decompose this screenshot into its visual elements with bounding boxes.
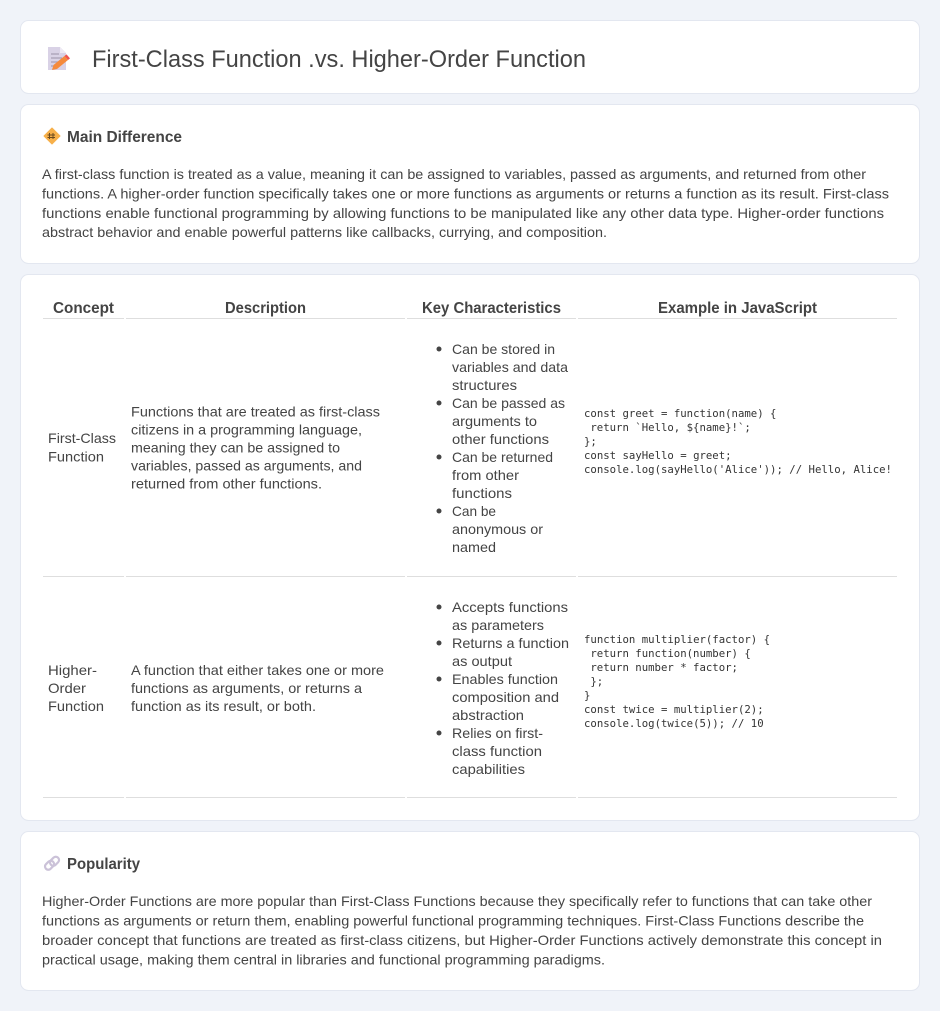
heading: main difference: Main Difference xyxy=(67,129,182,146)
code example: higher-order function: return number * factor; xyxy=(590,661,738,674)
code example: first-class function: const sayHello = greet; xyxy=(584,449,732,462)
list: higher-order characteristics: Accepts functions xyxy=(452,599,568,615)
code example: higher-order function: } xyxy=(584,689,590,702)
list: first-class characteristics: functions xyxy=(452,485,512,501)
text block: main difference xyxy=(42,166,889,240)
description: first-class function: Functions that are treated as first-class xyxy=(131,404,380,420)
text block: main difference: abstract behavior and enable powerful patterns like callbacks, currying, and composition. xyxy=(42,224,607,240)
panel: popularity xyxy=(20,832,920,990)
list: first-class characteristics: named xyxy=(452,539,496,555)
concept: first-class function: Function xyxy=(48,448,104,464)
description: first-class function: returned from other functions. xyxy=(131,476,322,492)
description: higher-order function: function as its result, or both. xyxy=(131,698,316,714)
concept: first-class function: First-Class xyxy=(48,430,116,446)
list: higher-order characteristics: as parameters xyxy=(452,617,544,633)
concept: higher-order function xyxy=(48,662,104,714)
text block: main difference: functions. A higher-order function specifically takes one or more functions as arguments or returns a function as its result. First-class xyxy=(42,186,889,202)
code example: higher-order function: }; xyxy=(590,675,603,688)
table row: higher-order function xyxy=(43,599,897,798)
list: first-class characteristics xyxy=(436,341,568,555)
text block: popularity: Higher-Order Functions are more popular than First-Class Functions because they specifically refer to functions that can take other xyxy=(42,893,872,909)
title: First-Class Function .vs. Higher-Order Function xyxy=(92,46,586,73)
list: first-class characteristics: variables and data xyxy=(452,359,568,375)
concept: higher-order function: Higher- xyxy=(48,662,97,678)
panel: comparison table xyxy=(20,274,920,820)
description: first-class function: citizens in a programming language, xyxy=(131,422,362,438)
list: higher-order characteristics: Enables function xyxy=(452,671,558,687)
code example: higher-order function: const twice = multiplier(2); xyxy=(584,703,764,716)
table row: first-class function xyxy=(43,341,897,576)
panel: title card xyxy=(20,20,920,94)
text block: popularity: broader concept that functions are treated as first-class citizens, but Higher-Order Functions actively demonstrate this concept in xyxy=(42,932,882,948)
code example: higher-order function xyxy=(584,633,770,730)
list: higher-order characteristics: Returns a function xyxy=(452,635,569,651)
list: first-class characteristics: Can be passed as xyxy=(452,395,565,411)
list: first-class characteristics: other functions xyxy=(452,431,549,447)
list: first-class characteristics: Can be returned xyxy=(452,449,553,465)
table header: Description xyxy=(225,300,306,317)
list: first-class characteristics: anonymous or xyxy=(452,521,543,537)
icon: document with pencil xyxy=(48,47,70,70)
icon: link xyxy=(44,855,60,871)
list: higher-order characteristics: Relies on first- xyxy=(452,725,543,741)
text block: popularity: functions as arguments or return them, enabling powerful functional programming techniques. First-Class Functions describe the xyxy=(42,912,864,928)
table header: Key Characteristics xyxy=(422,300,561,317)
list: higher-order characteristics: capabilities xyxy=(452,761,525,777)
list: higher-order characteristics: composition and xyxy=(452,689,559,705)
text block: main difference: A first-class function is treated as a value, meaning it can be assigned to variables, passed as arguments, and returned from other xyxy=(42,166,866,182)
table header: Example in JavaScript xyxy=(658,300,818,317)
code example: first-class function: return `Hello, ${name}!`; xyxy=(590,421,751,434)
concept: higher-order function: Function xyxy=(48,698,104,714)
code example: first-class function: console.log(sayHello('Alice')); // Hello, Alice! xyxy=(584,463,892,476)
table header xyxy=(43,300,897,318)
icon: warning diamond xyxy=(44,128,60,144)
text block: popularity: practical usage, making them central in libraries and functional programming paradigms. xyxy=(42,952,605,968)
code example: higher-order function: function multiplier(factor) { xyxy=(584,633,770,646)
text block: popularity xyxy=(42,893,882,968)
list: higher-order characteristics: as output xyxy=(452,653,512,669)
description: first-class function: variables, passed as arguments, and xyxy=(131,458,362,474)
concept: first-class function xyxy=(48,430,116,464)
description: first-class function: meaning they can be assigned to xyxy=(131,440,340,456)
list: first-class characteristics: arguments to xyxy=(452,413,537,429)
list: first-class characteristics: Can be xyxy=(452,503,496,519)
code example: higher-order function: return function(number) { xyxy=(590,647,751,660)
concept: higher-order function: Order xyxy=(48,680,86,696)
description: higher-order function xyxy=(131,662,384,714)
text block: main difference: functions enable functional programming by allowing functions to be manipulated like any other data type. Higher-order functions xyxy=(42,205,884,221)
description: higher-order function: A function that either takes one or more xyxy=(131,662,384,678)
list: first-class characteristics: structures xyxy=(452,377,517,393)
list: higher-order characteristics: class function xyxy=(452,743,542,759)
list: first-class characteristics: from other xyxy=(452,467,519,483)
code example: first-class function xyxy=(584,407,892,476)
list: higher-order characteristics: abstraction xyxy=(452,707,524,723)
list: higher-order characteristics xyxy=(436,599,569,777)
code example: first-class function: }; xyxy=(584,435,597,448)
description: first-class function xyxy=(131,404,380,492)
code example: first-class function: const greet = function(name) { xyxy=(584,407,776,420)
table header: Concept xyxy=(53,300,115,317)
code example: higher-order function: console.log(twice(5)); // 10 xyxy=(584,717,764,730)
description: higher-order function: functions as arguments, or returns a xyxy=(131,680,362,696)
heading: popularity: Popularity xyxy=(67,856,140,873)
list: first-class characteristics: Can be stored in xyxy=(452,341,555,357)
panel: main difference xyxy=(20,104,920,264)
